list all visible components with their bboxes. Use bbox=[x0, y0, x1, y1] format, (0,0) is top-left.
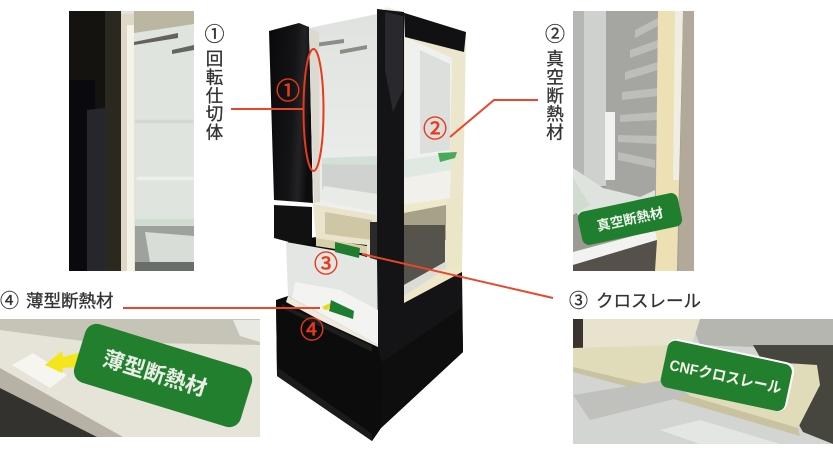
lower drawer front bbox=[276, 300, 381, 441]
top black band bbox=[382, 6, 466, 52]
label: vacuum insulation: 材 bbox=[546, 122, 564, 142]
sign: CNF cross rail bbox=[659, 337, 796, 413]
label: vacuum insulation: 真 bbox=[546, 49, 564, 69]
label: thin insulation: ④ bbox=[0, 290, 19, 312]
leader line 1 bbox=[231, 108, 303, 110]
label: vacuum insulation bbox=[545, 23, 565, 142]
sign: thin insulation bbox=[71, 321, 255, 430]
photo: rotating partition closeup bbox=[69, 11, 194, 271]
marker 3: ③ bbox=[314, 251, 338, 278]
label: vacuum insulation: 熱 bbox=[546, 104, 564, 124]
side panel interior bbox=[385, 8, 466, 310]
yellow arrow bbox=[45, 351, 82, 373]
label: cross rail: クロスレール bbox=[596, 291, 701, 311]
label: rotating partition: 体 bbox=[206, 122, 224, 142]
marker 2: ② bbox=[423, 116, 447, 143]
green tag: thin insulation bbox=[329, 300, 354, 319]
central black pillar bbox=[377, 9, 462, 362]
yellow arrow marker bbox=[322, 303, 330, 310]
middle compartment bbox=[313, 204, 377, 275]
label: vacuum insulation: ② bbox=[545, 23, 565, 46]
leader line 3 bbox=[362, 254, 553, 298]
marker 1: ① bbox=[276, 78, 300, 105]
upper compartment interior bbox=[309, 14, 377, 215]
cabinet backing bbox=[276, 225, 463, 441]
leader line 4 bbox=[123, 307, 320, 309]
refrigerator photo bbox=[269, 6, 466, 441]
label: thin insulation: 薄型断熱材 bbox=[26, 291, 114, 311]
label: rotating partition: 切 bbox=[206, 104, 223, 124]
marker 4: ④ bbox=[300, 317, 324, 344]
leader line 2 bbox=[450, 100, 538, 137]
photo: vacuum insulation closeup bbox=[573, 11, 694, 271]
sign text: thin insulation: 薄型断熱材 bbox=[100, 347, 210, 401]
label: rotating partition bbox=[204, 23, 224, 142]
bottom compartment bbox=[286, 242, 378, 345]
label: vacuum insulation: 空 bbox=[546, 68, 564, 88]
photo: cross rail closeup bbox=[573, 319, 833, 444]
photo: vacuum insulation closeup: 真空断熱材 bbox=[595, 204, 665, 234]
green tag: vacuum insulation bbox=[438, 152, 457, 162]
photo: cross rail closeup: CNFクロスレール bbox=[668, 357, 783, 397]
rotating partition bar bbox=[309, 28, 320, 203]
callout: ring around partition bbox=[304, 49, 324, 171]
green tag: cross rail bbox=[335, 242, 360, 258]
label: rotating partition: 回 bbox=[206, 49, 223, 69]
label: rotating partition: ① bbox=[204, 23, 224, 46]
photo: thin insulation closeup bbox=[0, 319, 260, 437]
label: cross rail: ③ bbox=[569, 290, 588, 312]
label: vacuum insulation: 断 bbox=[546, 86, 564, 106]
small drawer front bbox=[274, 205, 312, 245]
base side bbox=[381, 308, 463, 428]
label: rotating partition: 仕 bbox=[206, 86, 223, 106]
sign: vacuum insulation bbox=[577, 192, 683, 246]
left door bbox=[269, 23, 313, 203]
label: rotating partition: 転 bbox=[206, 68, 223, 88]
